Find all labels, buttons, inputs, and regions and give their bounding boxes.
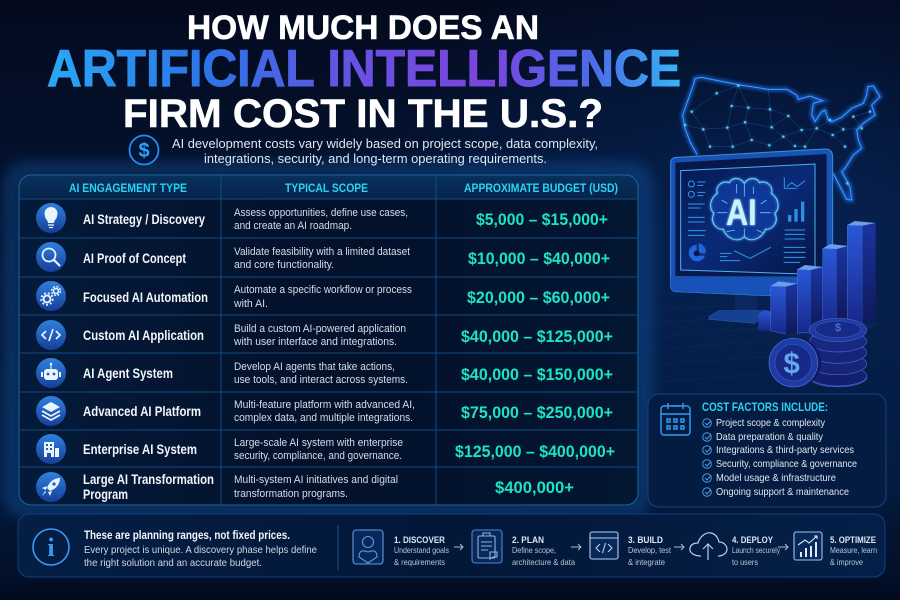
row: AI Agent System: $40,000 – $150,000+ [461, 365, 613, 384]
US network map [683, 77, 880, 200]
illustration: US map, monitor, bars and coins [640, 77, 882, 387]
step 3: build: Develop, test [628, 545, 672, 555]
table [19, 175, 638, 505]
step 4: deploy: to users [732, 557, 758, 567]
icon: rocket [36, 472, 66, 502]
row: Focused AI Automation: Automate a specific workflow or process [234, 284, 412, 296]
icon: calendar [661, 403, 690, 435]
step 4: deploy: Launch securely [732, 545, 781, 555]
title line 1: HOW MUCH DOES AN [187, 9, 539, 47]
planning note: the right solution and an accurate budget. [84, 557, 262, 569]
row: Custom AI Application: Build a custom AI-powered application [234, 323, 406, 335]
coin stack: $ [835, 322, 842, 334]
row: Enterprise AI System [36, 434, 615, 464]
monitor [671, 149, 833, 323]
step 5: optimize: 5. OPTIMIZE [830, 535, 876, 545]
cost factors list: Project scope & complexity [716, 417, 826, 429]
row: AI Strategy / Discovery [36, 203, 608, 233]
3D bar chart [752, 221, 882, 338]
row: AI Agent System [36, 358, 613, 388]
row: Advanced AI Platform: complex data, and multiple integrations. [234, 412, 413, 424]
cost factors list [703, 417, 857, 498]
row: Advanced AI Platform: Advanced AI Platform [83, 403, 201, 419]
row: AI Proof of Concept [36, 242, 610, 272]
icon: magnifier [36, 242, 66, 272]
icon: dollar badge: $ [138, 140, 150, 162]
planning note [84, 530, 317, 569]
row: Large AI Transformation Program: transformation programs. [234, 488, 348, 500]
row: Enterprise AI System: Enterprise AI System [83, 441, 197, 457]
row: Focused AI Automation: Focused AI Automation [83, 289, 208, 305]
step 4: deploy: 4. DEPLOY [732, 535, 773, 545]
arrow [454, 544, 463, 550]
step 2: plan [472, 530, 575, 567]
floor grid [640, 303, 780, 387]
row: AI Strategy / Discovery: and create an AI roadmap. [234, 220, 352, 232]
cost factors list: Integrations & third-party services [716, 444, 854, 456]
row: Custom AI Application: with user interface and integrations. [233, 336, 397, 348]
arrow [571, 544, 581, 550]
step 3: build: 3. BUILD [628, 535, 663, 545]
cost factors list: Security, compliance & governance [716, 458, 857, 470]
row: Focused AI Automation: with AI. [233, 298, 268, 310]
AI brain: AI [726, 192, 757, 233]
table header: APPROXIMATE BUDGET (USD) [464, 181, 618, 195]
row: AI Agent System: use tools, and interact across systems. [234, 374, 408, 386]
icon: dollar badge [130, 136, 158, 164]
icon: gears [36, 281, 66, 311]
row: Large AI Transformation Program [36, 471, 574, 502]
step 5: optimize: & improve [830, 557, 863, 567]
dollar coin: $ [784, 347, 800, 380]
row: Advanced AI Platform: $75,000 – $250,000+ [461, 403, 613, 422]
step 5: optimize: Measure, learn [830, 545, 877, 555]
row: Focused AI Automation [36, 281, 610, 311]
step 1: discover [353, 530, 449, 567]
row: Large AI Transformation Program: Program [83, 486, 128, 502]
table header [19, 175, 638, 199]
title [47, 9, 681, 136]
step 1: discover: & requirements [394, 557, 445, 567]
step 1: discover: 1. DISCOVER [394, 535, 445, 545]
dollar coin [769, 338, 821, 387]
row: Enterprise AI System: $125,000 – $400,000+ [455, 442, 615, 461]
planning note: These are planning ranges, not fixed prices. [84, 530, 290, 542]
row: AI Strategy / Discovery: Assess opportunities, define use cases, [234, 207, 408, 219]
row: Focused AI Automation: $20,000 – $60,000+ [467, 288, 610, 307]
row: Custom AI Application: $40,000 – $125,000+ [461, 327, 613, 346]
icon: building [36, 434, 66, 464]
icon: info [33, 529, 69, 565]
icon: light bulb [36, 203, 66, 233]
subtitle [172, 136, 598, 166]
row: AI Proof of Concept: and core functionality. [234, 259, 334, 271]
table header: AI ENGAGEMENT TYPE [69, 181, 187, 195]
row: Large AI Transformation Program: Multi-system AI initiatives and digital [234, 474, 398, 486]
AI brain [711, 178, 778, 240]
cost factors list: Data preparation & quality [716, 431, 824, 443]
row: Advanced AI Platform [36, 396, 613, 426]
step 5: optimize [794, 532, 877, 567]
icon: robot [36, 358, 66, 388]
icon: code brackets [36, 320, 66, 350]
step 3: build: & integrate [628, 557, 665, 567]
row: AI Agent System: Develop AI agents that take actions, [234, 361, 395, 373]
step 2: plan: 2. PLAN [512, 535, 544, 545]
table header: TYPICAL SCOPE [285, 181, 368, 195]
row: AI Strategy / Discovery: $5,000 – $15,000+ [476, 210, 608, 229]
cost factors list: Ongoing support & maintenance [716, 486, 849, 498]
cost factors heading: COST FACTORS INCLUDE: [702, 402, 828, 414]
row: Enterprise AI System: Large-scale AI system with enterprise [234, 437, 403, 449]
step 3: build [590, 532, 672, 567]
row: Large AI Transformation Program: $400,000+ [495, 478, 574, 497]
row: Advanced AI Platform: Multi-feature platform with advanced AI, [234, 399, 415, 411]
icon: info: i [47, 533, 55, 562]
arrow [674, 544, 684, 550]
row: AI Strategy / Discovery: AI Strategy / Discovery [83, 211, 205, 227]
subtitle: AI development costs vary widely based on project scope, data complexity, [172, 136, 598, 151]
step 2: plan: Define scope, [512, 545, 556, 555]
step 1: discover: Understand goals [394, 545, 449, 555]
panel: planning note and process steps [18, 514, 885, 577]
planning note: Every project is unique. A discovery phase helps define [84, 544, 317, 556]
icon: layers [36, 396, 66, 426]
row: AI Proof of Concept: AI Proof of Concept [83, 250, 186, 266]
arrow [778, 544, 788, 550]
subtitle: integrations, security, and long-term operating requirements. [204, 151, 547, 166]
panel: cost factors [648, 394, 886, 507]
cost factors list: Model usage & infrastructure [716, 472, 836, 484]
step 2: plan: architecture & data [512, 557, 575, 567]
row: Custom AI Application [36, 320, 613, 350]
row: AI Agent System: AI Agent System [83, 365, 173, 381]
row: AI Proof of Concept: $10,000 – $40,000+ [468, 249, 610, 268]
row: Enterprise AI System: security, compliance, and governance. [234, 450, 402, 462]
row: Custom AI Application: Custom AI Application [83, 327, 204, 343]
row: AI Proof of Concept: Validate feasibility with a limited dataset [234, 246, 410, 258]
coin stack [809, 318, 867, 387]
title line 3: FIRM COST IN THE U.S.? [123, 92, 603, 136]
title line 2: ARTIFICIAL INTELLIGENCE [47, 40, 681, 98]
step 4: deploy [690, 533, 781, 567]
row: Large AI Transformation Program: Large AI Transformation [83, 471, 214, 487]
screen widgets [688, 177, 806, 262]
